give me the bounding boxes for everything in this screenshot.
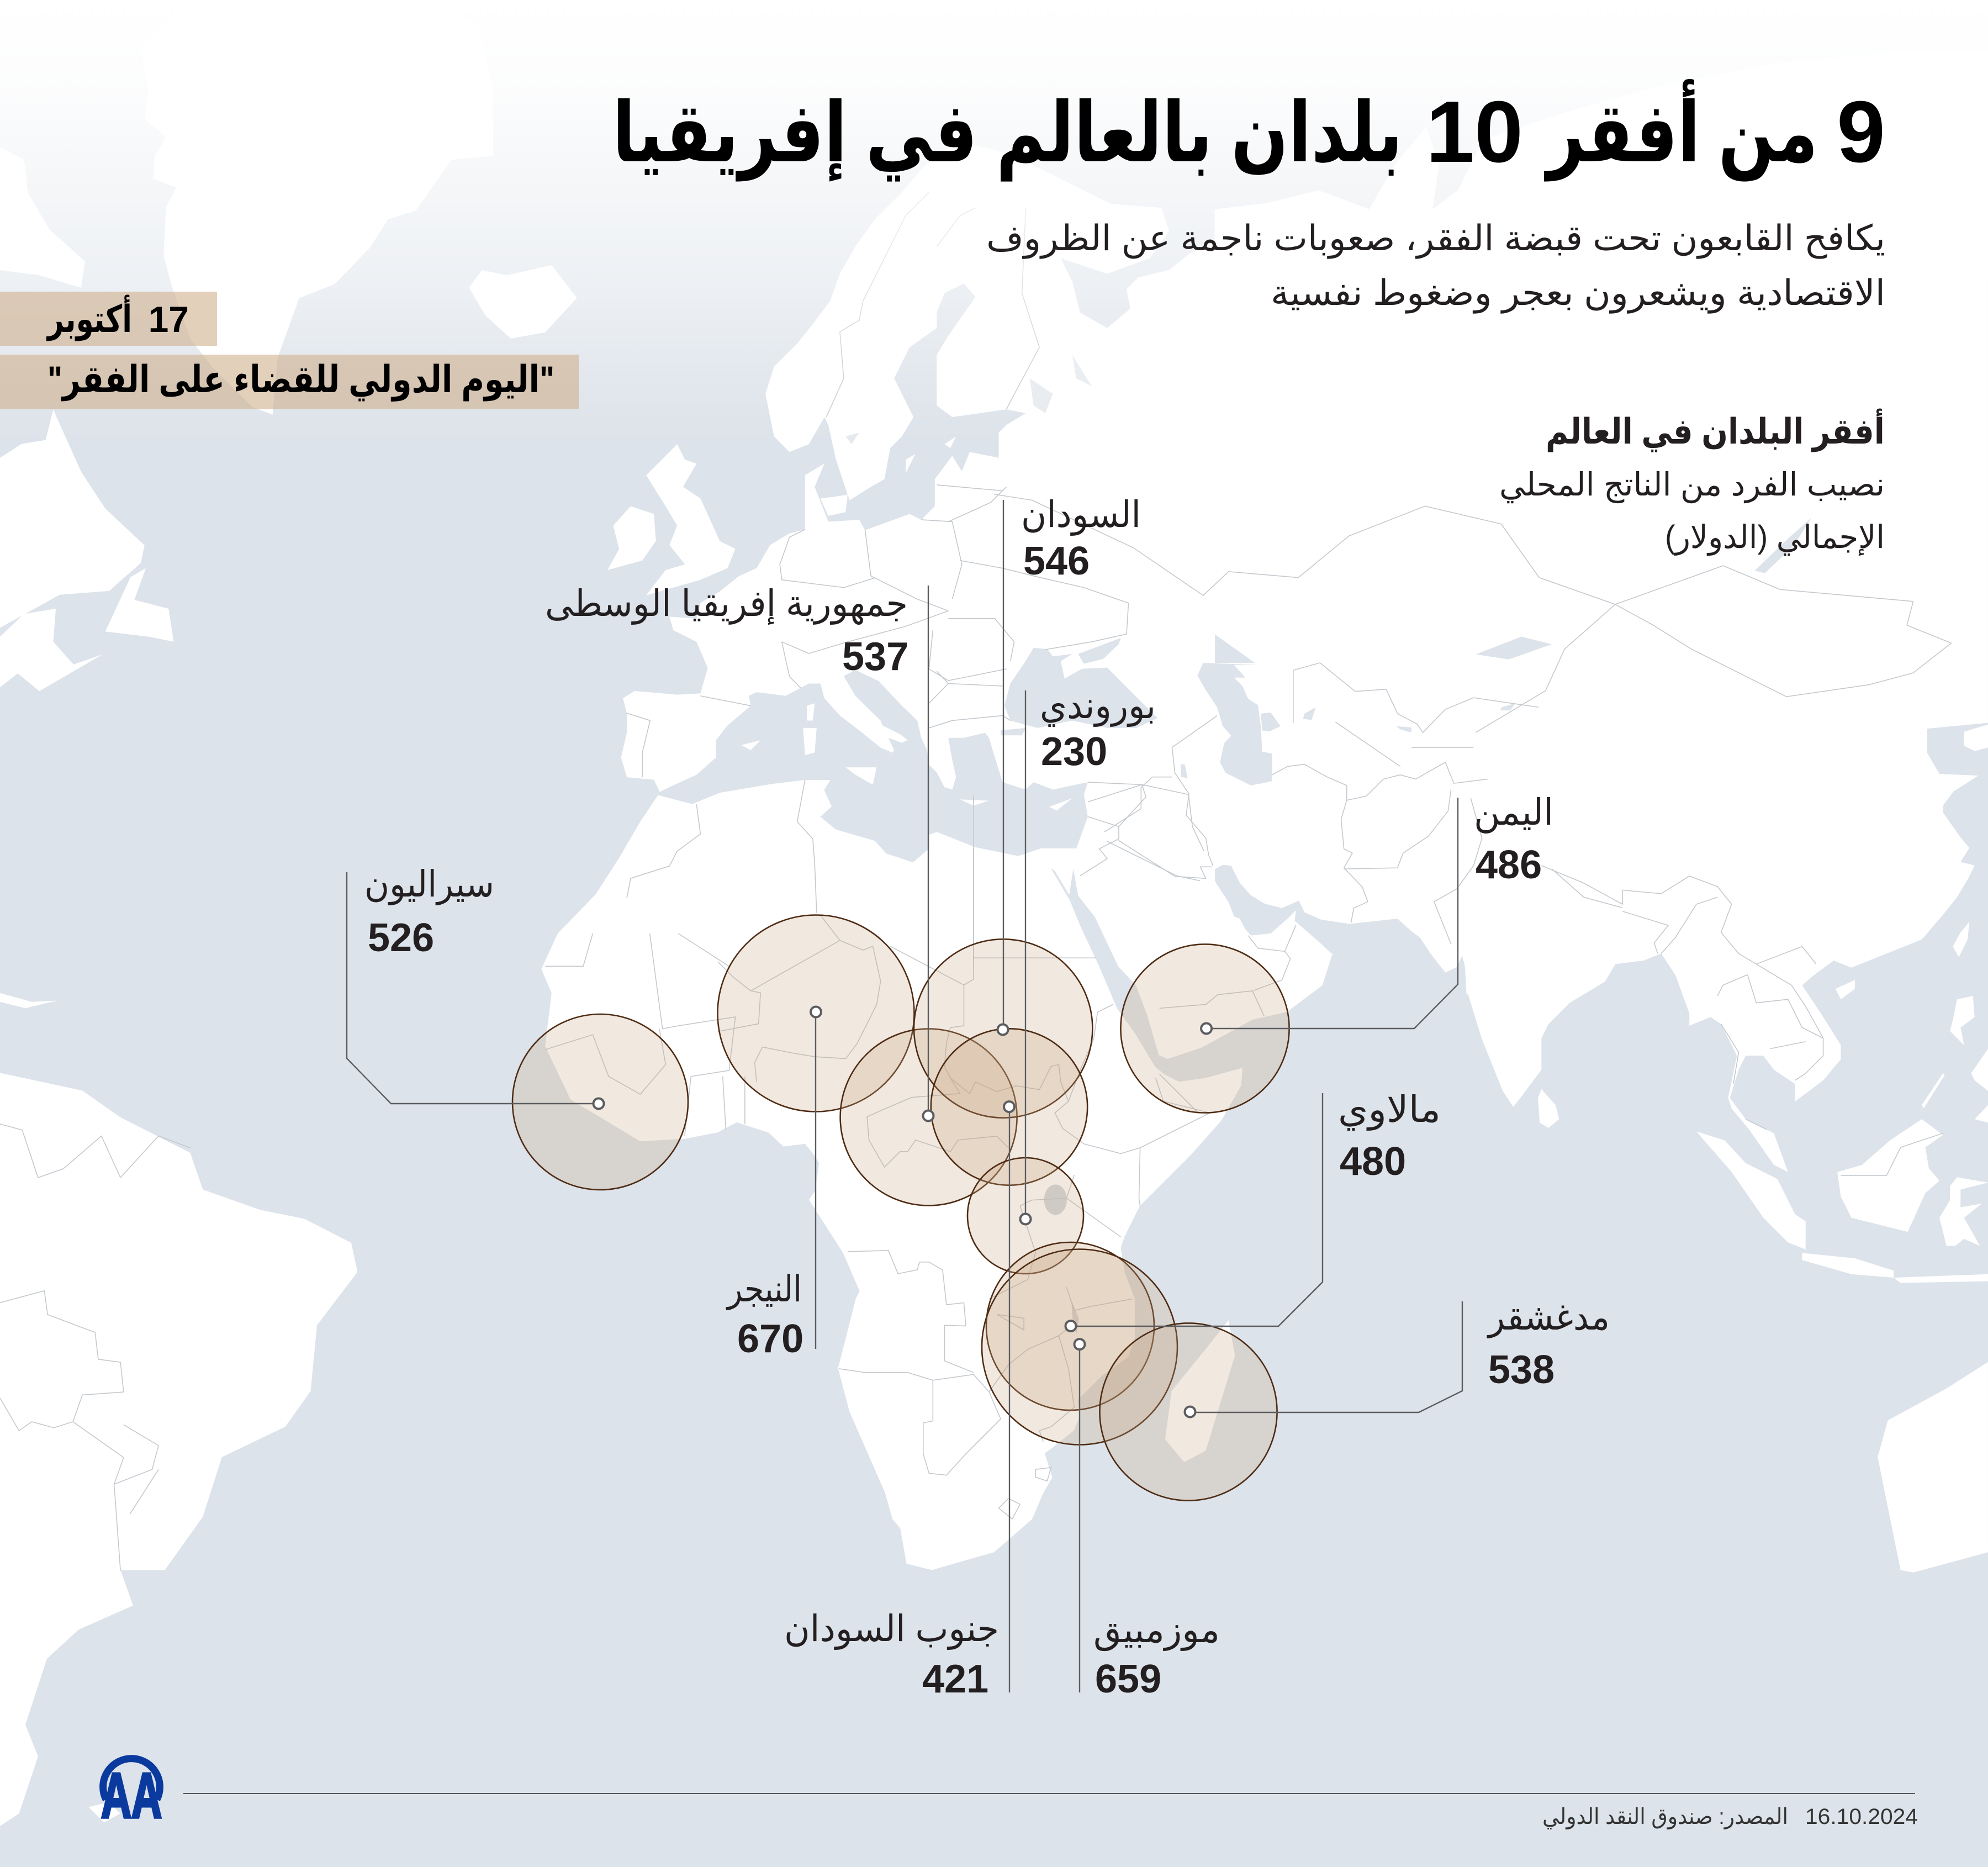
circle: Yemen [1120,944,1289,1113]
label: Niger: 670 [737,1317,803,1361]
subtitle [986,218,1885,314]
label: Mozambique: موزمبيق [1093,1609,1220,1652]
circle: Sudan [914,939,1092,1118]
leader: Madagascar [1190,1301,1462,1412]
label: Mozambique: 659 [1095,1657,1161,1701]
circle: Sierra Leone [512,1014,688,1190]
top white fade [0,0,1988,442]
Sri Lanka [1538,1089,1559,1128]
label: Sudan [1021,494,1141,583]
source and date [1542,1805,1918,1829]
label: Burundi: 230 [1041,730,1107,774]
Caribbean [0,993,57,1008]
international day banner [0,355,579,409]
label: Sudan: 546 [1023,539,1090,583]
leader: Sierra Leone [347,872,599,1104]
title: 10 [1426,83,1523,181]
legend heading: الإجمالي (الدولار) [1665,519,1885,556]
label: Malawi: مالاوي [1338,1089,1441,1131]
Mediterranean borders [627,671,1204,967]
west Africa borders [545,934,745,1136]
date banner: 17 [149,299,189,340]
Danish islands, Gotland, Estonian islands [821,436,956,516]
proportional circles [512,915,1289,1501]
leader: Malawi [1071,1093,1323,1326]
South America [0,1073,357,1826]
Scandinavia, NW Russia and central Europe [607,142,1215,669]
Africa [541,780,1242,1570]
label: South Sudan: جنوب السودان [784,1608,999,1650]
Sumatra [1696,1131,1806,1249]
leader: Burundi [1025,690,1026,1219]
label: Sudan: السودان [1021,494,1141,536]
label: Sierra Leone [364,863,494,960]
South and South-East Asia [1436,710,1988,1283]
label: Madagascar: 538 [1488,1348,1555,1392]
title: بلدان بالعالم في إفريقيا [612,86,1403,182]
label: Sierra Leone: 526 [368,916,434,960]
circle: Malawi [986,1242,1154,1410]
central and east Africa borders [718,795,1264,1519]
icon: Anadolu Agency logo: AA [101,1761,162,1832]
location dots [593,1006,1212,1417]
Middle East and Central Asia borders [1104,663,1538,990]
Borneo [1837,1119,1943,1232]
northern Asia borders [994,494,1951,732]
circle: South Sudan [931,1029,1087,1185]
Central Asia, Iran and Pakistan [1104,663,1546,994]
label: Sierra Leone: سيراليون [364,863,494,905]
lakes in Scandinavia and Russia [845,355,1092,444]
leader: Yemen [1207,798,1458,1029]
Great Britain [646,444,735,595]
leader: Niger [815,1012,816,1349]
subtitle: الاقتصادية ويشعرون بعجر وضغوط نفسية [1271,273,1885,314]
Iceland [469,265,577,339]
South America borders [0,1124,190,1570]
label: Madagascar [1487,1296,1610,1392]
Black Sea and Azov [1001,638,1157,898]
label: Burundi: بوروندي [1040,685,1156,727]
label: Niger: النيجر [726,1268,802,1310]
Siberia and China interior [1214,51,1988,811]
label: Central African Republic [545,583,908,679]
icon: Anadolu Agency logo [101,1759,162,1832]
Australia [1878,1362,1988,1573]
leader: Sudan [1003,500,1004,1030]
Hainan and Taiwan [1836,922,1969,999]
label: Burundi [1040,685,1156,774]
Java and Lesser Sunda [1802,1253,1988,1283]
leader: Central African Republic [928,586,929,1116]
Mediterranean islands [741,703,1072,810]
label: South Sudan [784,1608,999,1701]
Philippines [1922,996,1988,1122]
leader: Mozambique [1079,1344,1080,1692]
label: Mozambique [1093,1609,1220,1701]
Greenland [141,0,493,415]
label: Madagascar: مدغشقر [1487,1296,1610,1338]
legend heading [1499,408,1885,556]
label: Yemen: 486 [1476,843,1542,887]
other lakes [1044,518,1812,1334]
label: Central African Republic: 537 [842,635,908,679]
source and date: المصدر: صندوق النقد الدولي [1542,1805,1788,1829]
footer rule [183,1793,1915,1794]
legend heading: أفقر البلدان في العالم [1546,408,1885,452]
Korea tip [1964,725,1988,751]
source and date: 16.10.2024 [1805,1805,1918,1829]
inland seas and lakes [845,355,1812,1334]
legend heading: نصيب الفرد من الناتج المحلي [1499,467,1885,504]
Maritimes [0,609,103,691]
Newfoundland [105,568,174,642]
date banner [0,292,217,346]
circle: Madagascar [1099,1323,1277,1501]
southern Europe, Turkey and the Levant [621,654,1215,967]
leader lines [347,500,1462,1692]
Ireland [607,506,656,570]
Sulawesi [1939,1177,1988,1246]
Baffin island [0,147,85,288]
title [612,79,1885,182]
South-East Asia borders [1541,866,1943,1175]
title: من أفقر [1543,79,1818,182]
subtitle: يكافح القابعون تحت قبضة الفقر، صعوبات ناجمة عن الظروف [986,218,1885,259]
northern Europe borders [780,192,1129,688]
international day banner: "اليوم الدولي للقضاء على الفقر" [47,358,554,402]
Madagascar [1165,1320,1235,1462]
title: 9 [1837,83,1885,181]
circle: Burundi [967,1158,1083,1274]
leader: South Sudan [1009,1107,1010,1692]
label: Malawi: 480 [1340,1140,1406,1184]
Caspian, Aral and Kara-Bogaz [1181,663,1516,785]
date banner: أكتوبر [46,294,132,341]
label: South Sudan: 421 [922,1657,988,1701]
southern Arabia [1090,888,1333,1059]
Labrador and Quebec [0,410,145,627]
circle: Mozambique [982,1249,1177,1445]
label: Niger [726,1268,803,1361]
label: Malawi [1338,1089,1441,1184]
label: Yemen: اليمن [1474,792,1553,834]
label: Central African Republic: جمهورية إفريقيا الوسطى [545,583,908,625]
Falkland [89,1802,120,1822]
circle: Niger [718,915,914,1111]
circle: Central African Republic [840,1029,1017,1205]
country borders [0,192,1951,1570]
label: Yemen [1474,792,1553,887]
